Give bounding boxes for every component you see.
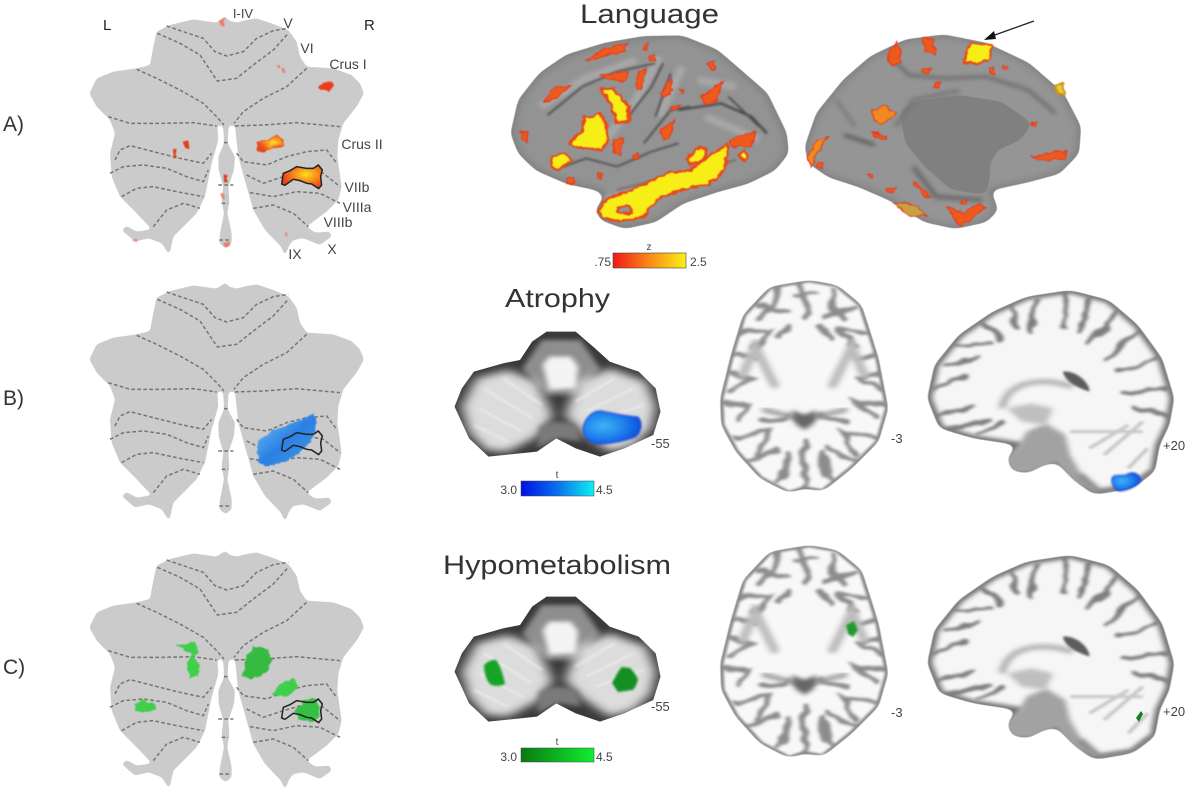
colorbar: z: 2.5	[690, 255, 707, 269]
colorbar: t green: 4.5	[596, 750, 613, 764]
panel: A language row	[3, 0, 1080, 269]
lobule labels: VIIIb	[324, 214, 353, 230]
panel label C: C)	[3, 656, 25, 679]
colorbar: t blue	[500, 470, 613, 497]
lobule labels: VIIIa	[343, 199, 372, 215]
panel label A: A)	[3, 113, 24, 136]
lobule labels: Crus I	[329, 56, 367, 72]
colorbar: t green	[500, 737, 613, 764]
hemisphere label R: R	[364, 17, 375, 34]
lobule labels: VIIb	[345, 179, 370, 195]
title: Atrophy: Atrophy	[505, 283, 610, 313]
panel label B: B)	[3, 387, 24, 410]
lobule labels: I-IV	[233, 6, 253, 21]
sagittal brain slice with hypometabolism	[915, 547, 1186, 767]
brain surface: lateral view with language map	[511, 36, 788, 228]
hemisphere label L: L	[103, 17, 111, 34]
cerebellar flatmap A with language activation	[89, 17, 364, 256]
coronal cerebellum slice with hypometabolism	[455, 597, 661, 722]
colorbar: z	[594, 242, 707, 269]
axial brain slice	[711, 275, 896, 502]
lobule labels: Crus II	[341, 136, 383, 152]
lobule labels: V	[283, 15, 293, 31]
colorbar: t blue: t	[556, 470, 559, 481]
panel: B atrophy row	[3, 275, 1186, 522]
lobule labels: VI	[300, 40, 314, 56]
colorbar: t blue: 4.5	[596, 483, 613, 497]
lobule labels	[233, 6, 383, 262]
arrow pointing at medial activation	[984, 21, 1034, 40]
lobule labels: IX	[288, 246, 302, 262]
colorbar: z: z	[646, 242, 652, 253]
slice label +20: +20	[1163, 438, 1185, 453]
sagittal brain slice with atrophy	[915, 282, 1186, 502]
slice label -55: -55	[651, 436, 670, 451]
cerebellar flatmap C with hypometabolism	[89, 551, 364, 790]
panel: C hypometabolism row	[3, 540, 1186, 790]
colorbar: t green: t	[556, 737, 559, 748]
brain surface: medial view with language map	[805, 35, 1080, 228]
slice label -55: -55	[651, 699, 670, 714]
slice label -3: -3	[891, 431, 903, 446]
colorbar: z: .75	[594, 255, 611, 269]
coronal cerebellum slice with atrophy	[455, 332, 661, 457]
slice label +20: +20	[1163, 704, 1185, 719]
slice label -3: -3	[891, 705, 903, 720]
lobule labels: X	[327, 241, 337, 257]
cerebellar flatmap B with atrophy	[89, 283, 364, 522]
title: Hypometabolism: Hypometabolism	[443, 550, 671, 580]
colorbar: t green: 3.0	[500, 750, 517, 764]
colorbar: t blue: 3.0	[500, 483, 517, 497]
axial brain slice with hypometabolism	[711, 540, 896, 767]
